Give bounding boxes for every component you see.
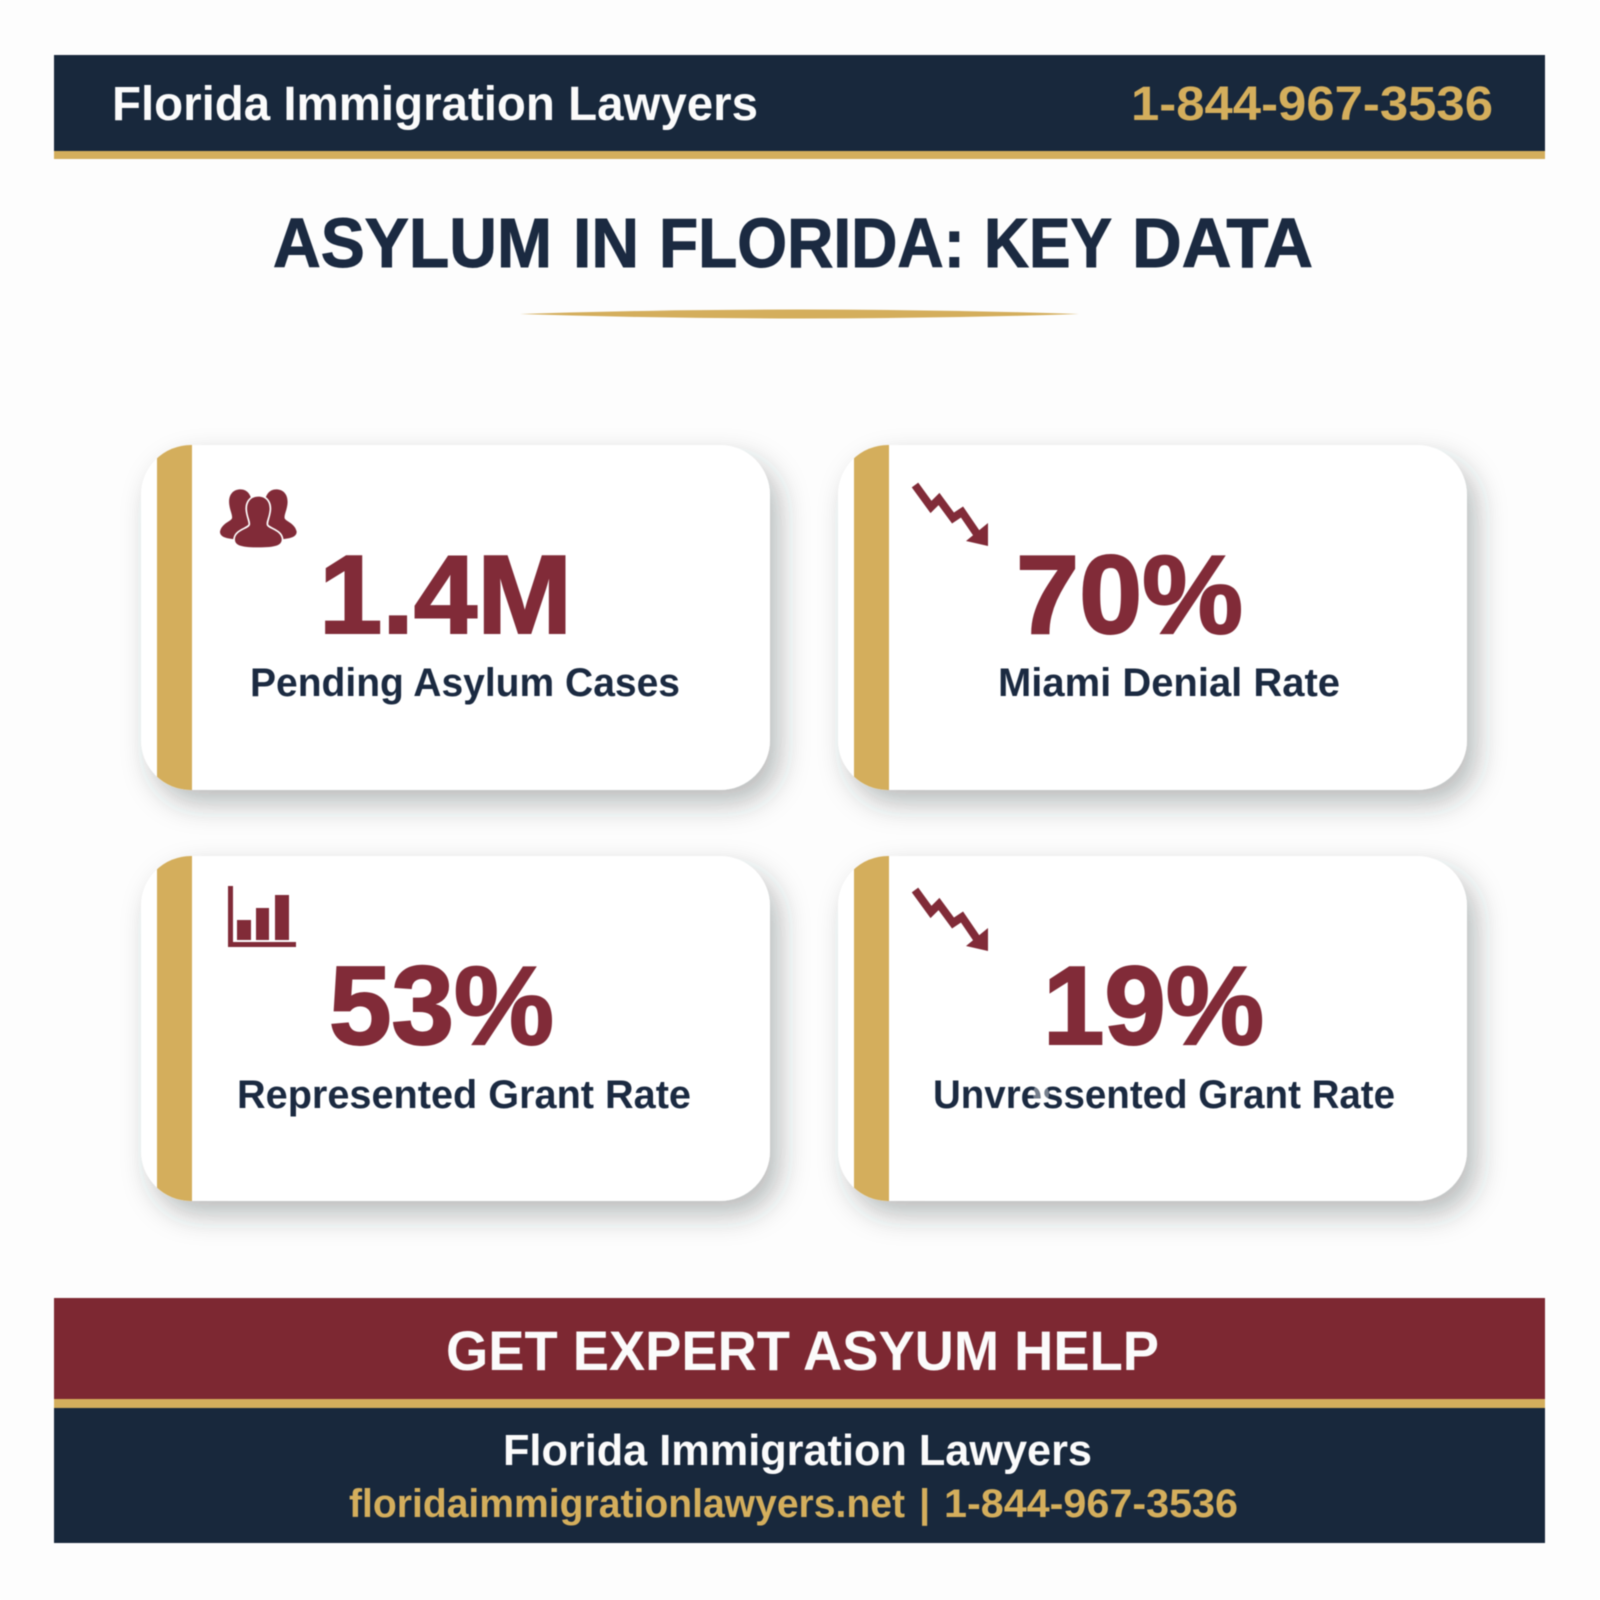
panel: miami denial rate xyxy=(838,445,1467,790)
footer website and phone xyxy=(349,1482,1238,1526)
stat label: Represented Grant Rate xyxy=(237,1073,691,1117)
header firm name: Florida Immigration Lawyers xyxy=(112,78,758,131)
call to action band xyxy=(54,1298,1545,1399)
stat value: 19% xyxy=(1043,944,1264,1068)
stat label: Miami Denial Rate xyxy=(998,661,1340,705)
footer website and phone: 1-844-967-3536 xyxy=(944,1482,1238,1526)
title xyxy=(273,204,1313,282)
icon: falling arrow xyxy=(915,890,988,951)
panel: pending asylum cases xyxy=(141,445,770,790)
panel: represented grant rate xyxy=(141,856,770,1201)
stat value: 1.4M xyxy=(319,533,572,657)
call to action text: GET EXPERT ASYUM HELP xyxy=(446,1319,1159,1382)
header phone number: 1-844-967-3536 xyxy=(1131,78,1493,131)
stat label: Pending Asylum Cases xyxy=(250,661,680,705)
icon: falling arrow xyxy=(915,485,988,546)
footer firm name: Florida Immigration Lawyers xyxy=(503,1426,1092,1475)
title: KEY xyxy=(984,204,1112,282)
icon: bar chart xyxy=(228,886,296,947)
stat value: 70% xyxy=(1016,533,1243,657)
title: FLORIDA: xyxy=(659,204,965,282)
title: DATA xyxy=(1132,204,1313,282)
icon: people xyxy=(220,489,297,547)
header bar xyxy=(54,55,1545,159)
footer website and phone: | xyxy=(919,1482,930,1526)
stat value: 53% xyxy=(329,944,554,1068)
gold divider xyxy=(54,1399,1545,1408)
title underline xyxy=(520,310,1079,318)
stat label: Unvressented Grant Rate xyxy=(933,1073,1395,1117)
title: IN xyxy=(573,204,639,282)
garbled letter smudge xyxy=(1033,1084,1049,1104)
footer xyxy=(54,1408,1545,1543)
title: ASYLUM xyxy=(273,204,552,282)
footer website and phone: floridaimmigrationlawyers.net xyxy=(349,1482,905,1526)
panel: unrepresented grant rate xyxy=(838,856,1467,1201)
